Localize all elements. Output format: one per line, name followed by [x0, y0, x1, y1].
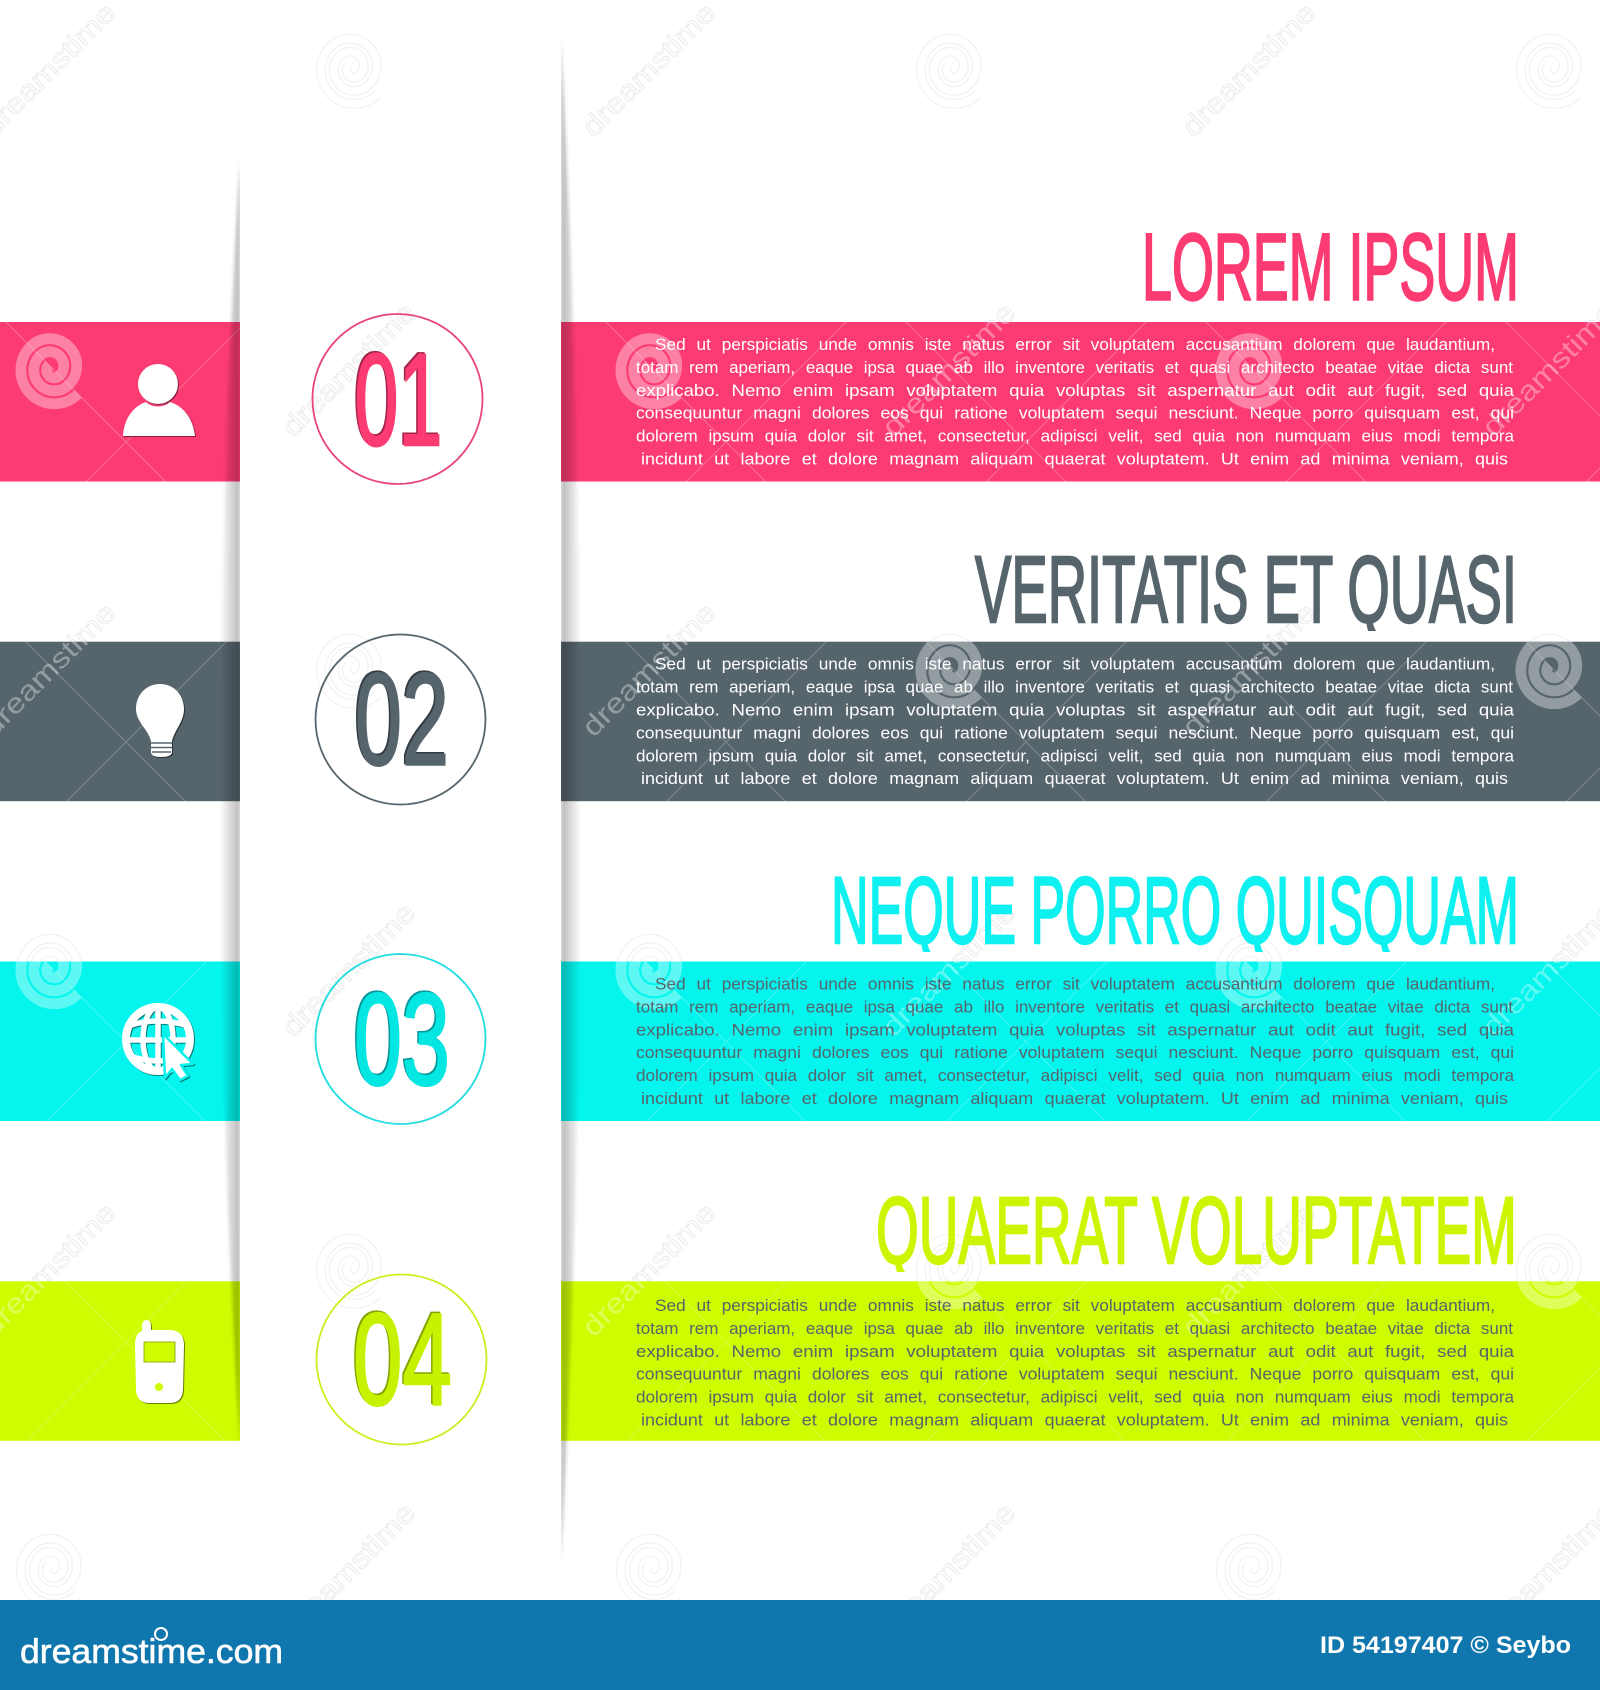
body text: totam rem aperiam, eaque ipsa quae ab illo inventore veritatis et quasi architecto beatae vitae dicta sunt — [636, 358, 1513, 377]
number circle 02 — [316, 634, 486, 804]
watermark: faint spirals and text on white: dreamstime — [276, 297, 421, 442]
icon: person — [123, 364, 195, 436]
number circle 02: 02 — [355, 646, 449, 792]
watermark: faint spirals and text on white: dreamstime — [1176, 597, 1321, 742]
body text: explicabo. Nemo enim ipsam voluptatem quia voluptas sit aspernatur aut odit aut fugit, sed quia — [636, 700, 1515, 720]
watermark: white spirals, text and lines on bands: dreamstime — [1176, 597, 1321, 742]
watermark: faint spirals and text on white: dreamstime — [1476, 1497, 1600, 1642]
number circle 01: 01 — [354, 326, 442, 473]
number circle 04: 04 — [353, 1286, 452, 1432]
watermark: faint spirals and text on white: dreamstime — [1176, 1197, 1321, 1342]
watermark: white spirals, text and lines on bands: dreamstime — [876, 297, 1021, 442]
watermark: white spirals, text and lines on bands: dreamstime — [1176, 1197, 1321, 1342]
watermark: faint spirals and text on white: dreamstime — [1476, 297, 1600, 442]
number circle 01 — [312, 314, 482, 484]
watermark: faint spirals and text on white: dreamstime — [876, 297, 1021, 442]
body text: consequuntur magni dolores eos qui ratione voluptatem sequi nesciunt. Neque porro quisquam est, qui — [636, 404, 1514, 423]
colour bands — [0, 322, 1600, 1441]
body text: totam rem aperiam, eaque ipsa quae ab illo inventore veritatis et quasi architecto beatae vitae dicta sunt — [636, 678, 1513, 697]
number circle 01: 01 — [353, 324, 441, 472]
body text: dolorem ipsum quia dolor sit amet, consectetur, adipisci velit, sed quia non numquam eius modi tempora — [636, 746, 1515, 765]
number circle 03: 03 — [354, 966, 450, 1112]
step 3 — [126, 858, 1519, 1124]
footer credit: ID 54197407 © Seybo — [1320, 1632, 1571, 1659]
number circle 04 — [316, 1274, 486, 1444]
body text: totam rem aperiam, eaque ipsa quae ab illo inventore veritatis et quasi architecto beatae vitae dicta sunt — [636, 997, 1513, 1016]
center column shadow: right — [561, 50, 578, 1550]
watermark: faint spirals and text on white: dreamstime — [276, 897, 421, 1042]
icon: globe with cursor — [126, 1007, 193, 1080]
body text: incidunt ut labore et dolore magnam aliquam quaerat voluptatem. Ut enim ad minima veniam, quis — [641, 1089, 1508, 1108]
watermark: white spirals, text and lines on bands — [0, 297, 1600, 1460]
watermark: white spirals, text and lines on bands: dreamstime — [1476, 297, 1600, 442]
body text: incidunt ut labore et dolore magnam aliquam quaerat voluptatem. Ut enim ad minima veniam, quis — [641, 1410, 1508, 1430]
panel: center column — [240, 0, 561, 1600]
body text: incidunt ut labore et dolore magnam aliquam quaerat voluptatem. Ut enim ad minima veniam, quis — [641, 450, 1508, 468]
body text: totam rem aperiam, eaque ipsa quae ab illo inventore veritatis et quasi architecto beatae vitae dicta sunt — [636, 1319, 1513, 1338]
body text: dolorem ipsum quia dolor sit amet, consectetur, adipisci velit, sed quia non numquam eius modi tempora — [636, 1388, 1515, 1407]
watermark: white spirals, text and lines on bands: dreamstime — [576, 1197, 721, 1342]
watermark: faint spirals and text on white: dreamstime — [576, 0, 721, 142]
footer bar — [0, 1600, 1600, 1690]
body text: Sed ut perspiciatis unde omnis iste natus error sit voluptatem accusantium dolorem que laudantium, — [655, 655, 1495, 674]
number circle 02: 02 — [354, 644, 448, 791]
step 4 — [135, 1178, 1517, 1444]
body text: dolorem ipsum quia dolor sit amet, consectetur, adipisci velit, sed quia non numquam eius modi tempora — [636, 427, 1515, 446]
icon: light bulb — [136, 684, 184, 757]
body text — [636, 655, 1515, 788]
body text: consequuntur magni dolores eos qui ratione voluptatem sequi nesciunt. Neque porro quisquam est, qui — [636, 1365, 1514, 1384]
body text — [636, 1296, 1515, 1430]
step 1 — [123, 214, 1519, 484]
body text: dolorem ipsum quia dolor sit amet, consectetur, adipisci velit, sed quia non numquam eius modi tempora — [636, 1066, 1515, 1085]
body text: Sed ut perspiciatis unde omnis iste natus error sit voluptatem accusantium dolorem que laudantium, — [655, 1296, 1495, 1315]
body text: explicabo. Nemo enim ipsam voluptatem quia voluptas sit aspernatur aut odit aut fugit, sed quia — [636, 1020, 1515, 1039]
number circle 04: 04 — [352, 1284, 450, 1431]
body text: explicabo. Nemo enim ipsam voluptatem quia voluptas sit aspernatur aut odit aut fugit, sed quia — [636, 1342, 1515, 1361]
number circle 03: 03 — [352, 964, 448, 1111]
body text: consequuntur magni dolores eos qui ratione voluptatem sequi nesciunt. Neque porro quisquam est, qui — [636, 1043, 1514, 1062]
watermark: faint spirals and text on white: dreamstime — [1176, 0, 1321, 142]
watermark: faint spirals and text on white: dreamstime — [876, 1497, 1021, 1642]
body text — [636, 335, 1515, 468]
watermark: faint spirals and text on white: dreamstime — [1476, 897, 1600, 1042]
body text: consequuntur magni dolores eos qui ratione voluptatem sequi nesciunt. Neque porro quisquam est, qui — [636, 723, 1514, 742]
body text: Sed ut perspiciatis unde omnis iste natus error sit voluptatem accusantium dolorem que laudantium, — [655, 974, 1495, 994]
body text: explicabo. Nemo enim ipsam voluptatem quia voluptas sit aspernatur aut odit aut fugit, sed quia — [636, 381, 1515, 400]
number circle 03 — [316, 954, 486, 1124]
step 2 — [136, 537, 1517, 804]
icon: mobile phone — [135, 1320, 184, 1403]
watermark: faint spirals and text on white: dreamstime — [576, 1197, 721, 1342]
body text: Sed ut perspiciatis unde omnis iste natus error sit voluptatem accusantium dolorem que laudantium, — [655, 335, 1495, 354]
footer logo: dreamstime.com — [20, 1633, 283, 1671]
watermark: faint spirals and text on white: dreamstime — [276, 1497, 421, 1642]
watermark: white spirals, text and lines on bands: dreamstime — [576, 597, 721, 742]
watermark: faint spirals and text on white: dreamstime — [876, 897, 1021, 1042]
watermark: white spirals, text and lines on bands: dreamstime — [1476, 897, 1600, 1042]
body text — [636, 974, 1515, 1108]
watermark: white spirals, text and lines on bands: dreamstime — [876, 897, 1021, 1042]
body text: incidunt ut labore et dolore magnam aliquam quaerat voluptatem. Ut enim ad minima veniam, quis — [641, 769, 1508, 788]
watermark: faint spirals and text on white: dreamstime — [576, 597, 721, 742]
center column shadow: left — [222, 168, 240, 1437]
